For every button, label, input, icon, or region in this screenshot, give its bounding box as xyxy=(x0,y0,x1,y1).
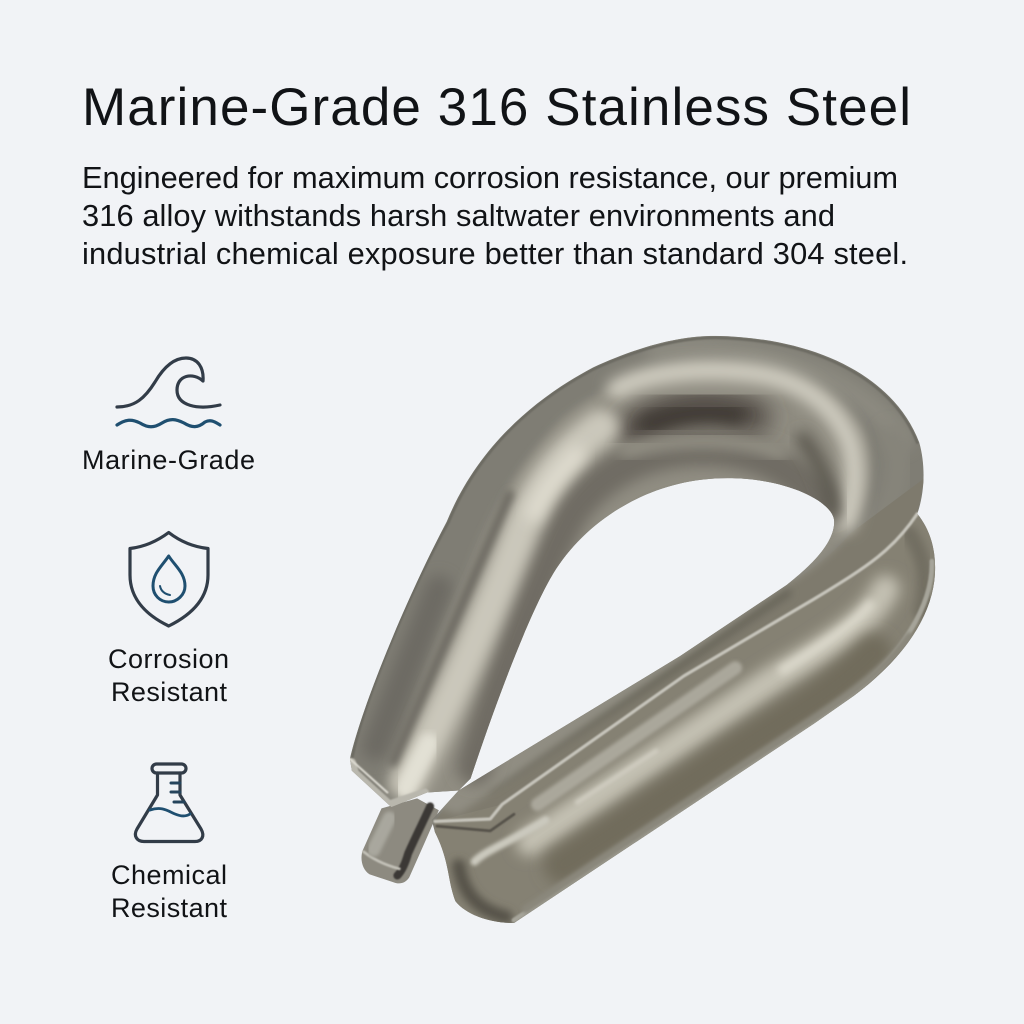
description text: industrial chemical exposure better than standard 304 steel. xyxy=(82,236,908,271)
icon: shield with water drop xyxy=(130,532,208,626)
title: Marine-Grade 316 Stainless Steel xyxy=(82,78,911,137)
label: Marine-Grade: Marine-Grade xyxy=(82,445,255,475)
front flange xyxy=(505,479,924,762)
thimble end tip xyxy=(361,798,439,883)
description text: Engineered for maximum corrosion resistance, our premium xyxy=(82,160,898,195)
left arm cut end xyxy=(352,762,425,804)
description text: 316 alloy withstands harsh saltwater environments and xyxy=(82,198,835,233)
product image: stainless steel wire rope thimble xyxy=(350,336,936,923)
icon: flask xyxy=(135,764,203,842)
label: Chemical Resistant: Resistant xyxy=(111,893,227,923)
upper groove xyxy=(389,363,870,814)
label: Corrosion Resistant: Corrosion xyxy=(108,644,229,674)
label: Chemical Resistant: Chemical xyxy=(111,860,227,890)
icon: wave xyxy=(117,358,220,427)
flange bright edge xyxy=(435,514,917,821)
description text xyxy=(82,160,908,271)
thimble body xyxy=(350,336,936,923)
lower groove xyxy=(434,514,936,923)
rim shading variation xyxy=(376,589,439,747)
label: Chemical Resistant xyxy=(111,860,227,923)
label: Corrosion Resistant xyxy=(108,644,229,707)
rim outer edge shading xyxy=(352,338,917,759)
label: Corrosion Resistant: Resistant xyxy=(111,677,227,707)
